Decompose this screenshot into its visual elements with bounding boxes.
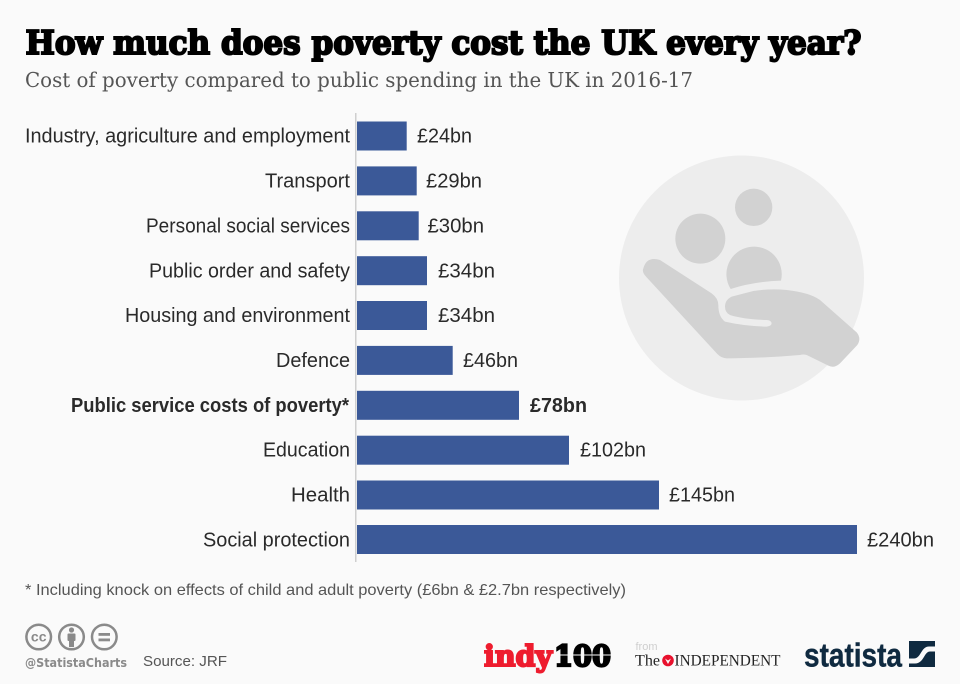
row: Public service costs of poverty: Public service costs of poverty*: [71, 395, 349, 417]
row: Defence: Defence: [276, 350, 350, 372]
row: Public order and safety: £34bn: [438, 260, 495, 282]
row: Industry, agriculture and employment: £24bn: [417, 126, 472, 148]
row: Personal social services: £30bn: [428, 216, 484, 238]
footnote: * Including knock on effects of child and adult poverty (£6bn & £2.7bn respectively): [25, 582, 626, 599]
row: Education: £102bn: [580, 440, 646, 462]
icon: creative commons licence: cc: [31, 628, 47, 644]
logo: indy100: [484, 639, 613, 673]
row: Health: £145bn: [669, 484, 735, 506]
row: Defence: [276, 346, 518, 375]
row: Education: [263, 436, 646, 465]
row: Industry, agriculture and employment: [25, 122, 472, 150]
row: Personal social services: Personal social services: [146, 216, 350, 238]
row: Social protection: £240bn: [867, 530, 934, 552]
logo: from The Independent: INDEPENDENT: [674, 652, 781, 670]
row: Social protection: [203, 525, 934, 554]
row: Housing and environment: £34bn: [438, 305, 495, 327]
row: Education: Education: [263, 440, 350, 462]
logo: statista: statista: [804, 636, 903, 674]
row: Transport: £29bn: [426, 170, 482, 192]
row: Public service costs of poverty: £78bn: [530, 395, 587, 417]
logo: indy100: indy: [484, 639, 553, 673]
row: Defence: £46bn: [463, 350, 518, 372]
row: Public service costs of poverty: [71, 391, 587, 420]
row: Housing and environment: [125, 301, 495, 330]
row: Personal social services: [146, 211, 484, 240]
subtitle: Cost of poverty compared to public spending in the UK in 2016-17: [25, 68, 693, 92]
logo: indy100: 100: [554, 639, 611, 673]
logo: from The Independent: The: [635, 652, 660, 670]
row: Transport: [265, 166, 482, 195]
row: Public order and safety: Public order and safety: [149, 260, 350, 282]
illustration: hand holding coins: [619, 156, 864, 400]
bar chart: [25, 122, 934, 554]
icon: creative commons licence: [26, 625, 117, 649]
row: Public order and safety: [149, 256, 495, 285]
logo: from The Independent: [635, 641, 781, 670]
row: Health: Health: [291, 484, 350, 506]
source: Source: JRF: [143, 653, 227, 670]
logo: from The Independent: from: [636, 641, 658, 653]
row: Housing and environment: Housing and environment: [125, 305, 350, 327]
row: Health: [291, 480, 735, 510]
title: How much does poverty cost the UK every year?: [26, 23, 862, 62]
row: Industry, agriculture and employment: Industry, agriculture and employment: [25, 126, 350, 148]
row: Social protection: Social protection: [203, 530, 350, 552]
credit handle: @StatistaCharts: [25, 656, 127, 670]
row: Transport: Transport: [265, 170, 350, 192]
axis line: [355, 113, 356, 562]
